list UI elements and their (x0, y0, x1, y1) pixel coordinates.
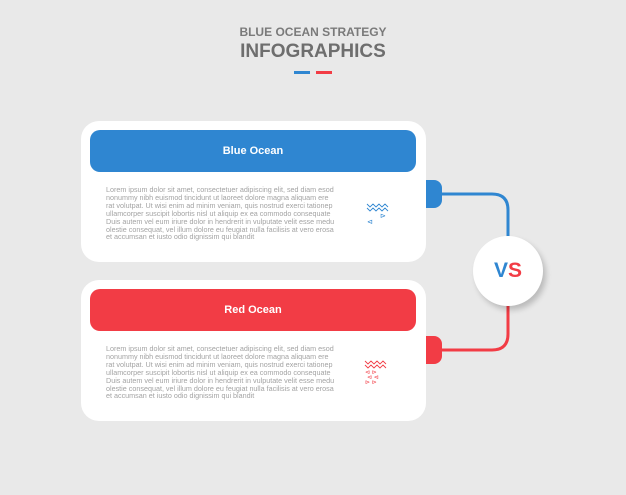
icon: waves and fish (366, 204, 388, 226)
title underline dashes (294, 71, 332, 74)
icon: waves and fish: ⊳ (380, 213, 386, 220)
header: Blue Ocean (90, 130, 416, 172)
tab: blue (426, 180, 442, 208)
text block: rat volutpat. Ut wisi enim ad minim veniam, quis nostrud exerci tationep (106, 360, 333, 369)
text block: Lorem ipsum dolor sit amet, consectetuer adipiscing elit, sed diam esod (106, 344, 334, 353)
text block: Duis autem vel eum iriure dolor in hendrerit in vulputate velit esse medu (106, 376, 334, 385)
text block: nonummy nibh euismod tincidunt ut laoreet dolore magna aliquam ere (106, 352, 329, 361)
panel: blue ocean (81, 121, 426, 262)
text block: ullamcorper suscipit lobortis nisl ut aliquip ex ea commodo consequate (106, 368, 331, 377)
title (239, 25, 387, 62)
header: Red Ocean (90, 289, 416, 331)
text block (106, 185, 334, 241)
icon: waves and many fish: ⊲ ⊳ (365, 370, 377, 376)
tab: red (426, 336, 442, 364)
text block: et accumsan et iusto odio dignissim qui blandit (106, 232, 254, 241)
title: BLUE OCEAN STRATEGY (239, 25, 387, 39)
VS circle (473, 236, 543, 306)
title: INFOGRAPHICS (240, 41, 386, 62)
VS circle: VS (494, 259, 522, 282)
text block: Duis autem vel eum iriure dolor in hendrerit in vulputate velit esse medu (106, 217, 334, 226)
text block: ullamcorper suscipit lobortis nisl ut aliquip ex ea commodo consequate (106, 209, 331, 218)
text block: nonummy nibh euismod tincidunt ut laoreet dolore magna aliquam ere (106, 193, 329, 202)
header: Red Ocean: Red Ocean (224, 304, 282, 316)
header: Blue Ocean: Blue Ocean (223, 145, 283, 157)
icon: waves and fish: ⊲ (367, 219, 373, 226)
text block: rat volutpat. Ut wisi enim ad minim veniam, quis nostrud exerci tationep (106, 201, 333, 210)
text block: Lorem ipsum dolor sit amet, consectetuer adipiscing elit, sed diam esod (106, 185, 334, 194)
text block: et accumsan et iusto odio dignissim qui blandit (106, 391, 254, 400)
text block: olestie consequat, vel illum dolore eu feugiat nulla facilisis at vero erosa (106, 384, 334, 393)
icon: waves and many fish (364, 360, 386, 384)
panel: red ocean (81, 280, 426, 421)
text block (106, 344, 334, 400)
text block: olestie consequat, vel illum dolore eu feugiat nulla facilisis at vero erosa (106, 225, 334, 234)
icon: waves and many fish: ⊲ ⊲ (367, 375, 379, 381)
